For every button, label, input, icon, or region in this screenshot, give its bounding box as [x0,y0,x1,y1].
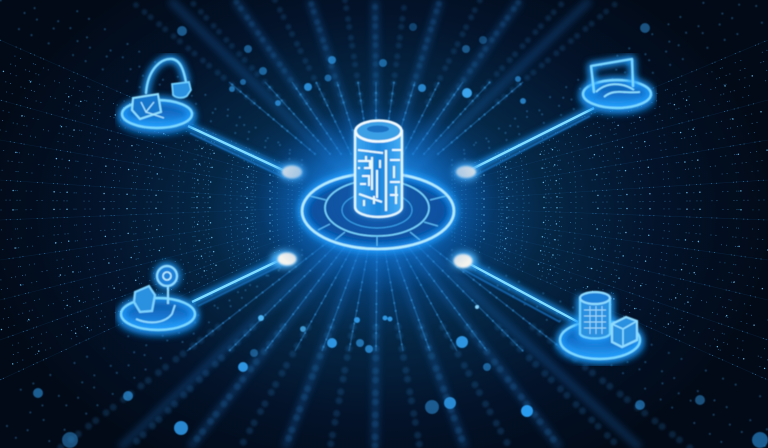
node: bottom right, database and cube [556,292,644,364]
wide radial light streaks [120,0,640,448]
node: bottom left, valve and cup [117,266,199,337]
central hub [257,105,497,295]
connector: top right [470,108,594,176]
hub platform rings [302,173,454,249]
connector: bottom left [192,259,282,306]
node: top right, screen frame [579,59,655,115]
node: top left, cloud arch and laptop [117,59,197,136]
connector: bottom right [462,263,578,322]
database cylinder [355,120,402,217]
connector end glows [271,163,479,269]
connector: top left [188,126,287,178]
